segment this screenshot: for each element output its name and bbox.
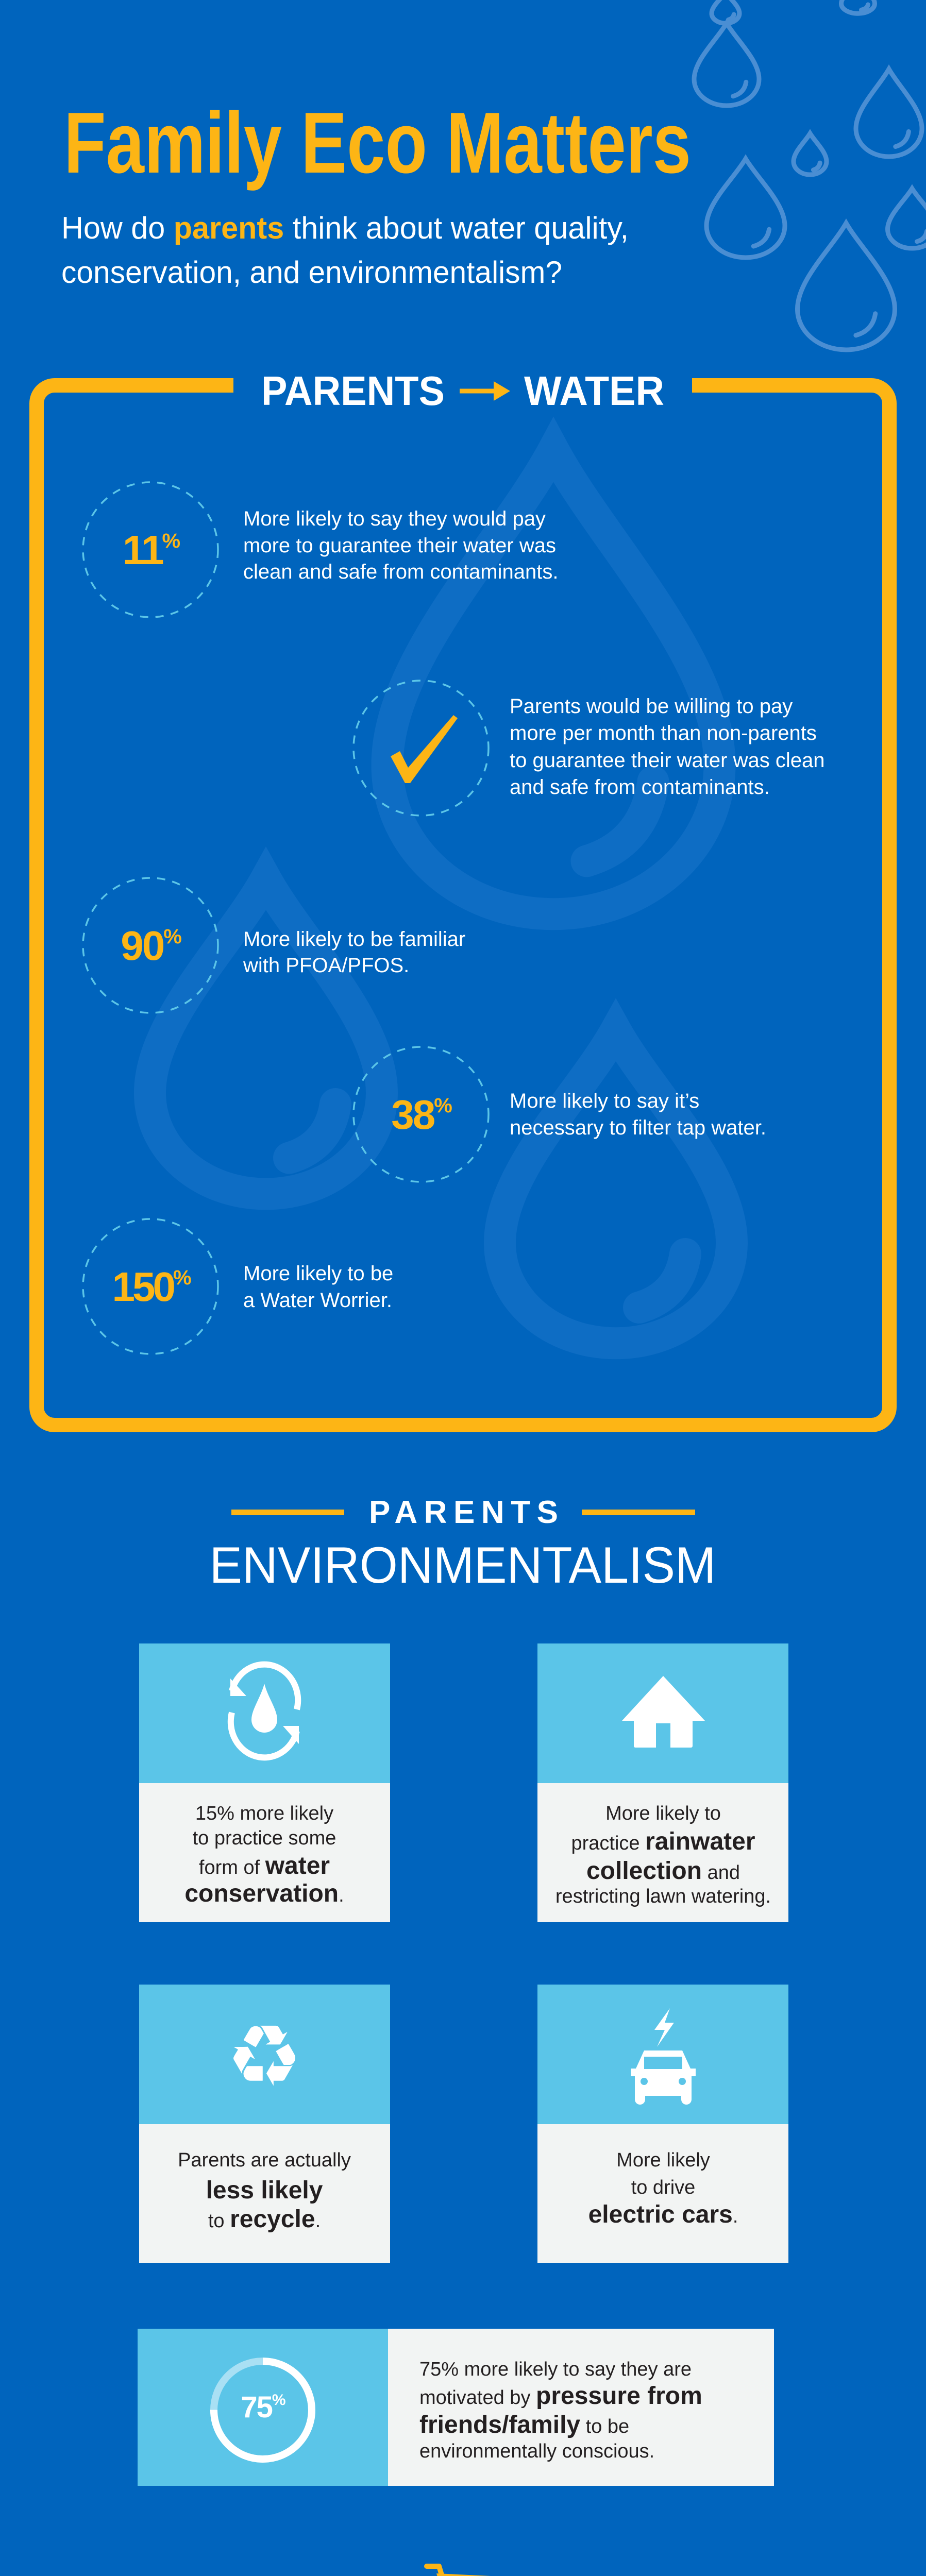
subtitle: conservation, and environmentalism? <box>61 255 562 290</box>
ring chart 75% <box>214 2361 312 2459</box>
stat: 38%: More likely to say it’s <box>510 1090 699 1112</box>
icon: house <box>622 1676 705 1748</box>
stat: 150%: a Water Worrier. <box>243 1289 392 1312</box>
stat: 11%: 11 <box>123 527 162 573</box>
stat: check: more per month than non-parents <box>510 722 817 744</box>
icon: shopping cart <box>427 2566 491 2576</box>
card: rainwater collection: More likely to <box>605 1803 721 1824</box>
panel heading: PARENTS <box>261 368 445 414</box>
heading: parents environmentalism <box>209 1495 716 1594</box>
card: water conservation: form of water <box>199 1852 330 1879</box>
card: water conservation: 15% more likely <box>195 1803 333 1824</box>
stat: 150%: 150 <box>112 1264 173 1310</box>
stat: 150%: More likely to be <box>243 1262 393 1285</box>
stat: 38% <box>353 1047 766 1182</box>
stat: 150%: % <box>173 1266 191 1289</box>
stat: 38%: % <box>434 1094 452 1117</box>
stat: 90% <box>83 878 465 1013</box>
panel heading <box>261 368 664 414</box>
title: Family Eco Matters <box>64 94 691 191</box>
icon: recycle: ♻ <box>226 2007 302 2106</box>
card: recycling: Parents are actually <box>178 2149 351 2171</box>
stat: 90%: with PFOA/PFOS. <box>243 954 409 977</box>
section: header and water panel <box>29 0 926 1432</box>
card: water conservation: conservation. <box>184 1880 344 1907</box>
subtitle: How do parents think about water quality, <box>61 211 629 245</box>
card: 75% social pressure: motivated by pressure from <box>419 2382 702 2410</box>
ring chart 75%: % <box>272 2392 285 2409</box>
stat: check: Parents would be willing to pay <box>510 695 793 718</box>
stat: 150% <box>83 1219 393 1354</box>
card: recycling: less likely <box>206 2177 323 2204</box>
card: electric cars: electric cars. <box>588 2201 738 2228</box>
stat: 11%: More likely to say they would pay <box>243 507 546 530</box>
panel: parents and water <box>37 368 889 1425</box>
stat: 90%: 90 <box>121 923 163 969</box>
stat: check: and safe from contaminants. <box>510 776 770 799</box>
stat: 90%: More likely to be familiar <box>243 928 465 951</box>
subtitle <box>61 211 629 290</box>
icon: water cycle <box>230 1665 299 1757</box>
card: rainwater collection <box>537 1643 788 1922</box>
stat: 38%: 38 <box>391 1092 434 1138</box>
card: electric cars: More likely <box>616 2149 710 2171</box>
divider with cart icon <box>31 2566 883 2576</box>
background drops <box>150 450 732 1343</box>
card: rainwater collection: restricting lawn watering. <box>555 1886 771 1907</box>
card: water conservation: to practice some <box>193 1827 336 1849</box>
card: recycling <box>139 1985 390 2263</box>
card: water conservation <box>139 1643 390 1922</box>
card: 75% social pressure: 75% more likely to say they are <box>419 2359 692 2380</box>
decorative header drops <box>694 0 926 350</box>
panel heading: WATER <box>524 368 664 414</box>
card: rainwater collection: collection and <box>586 1857 740 1885</box>
stat: 38%: necessary to filter tap water. <box>510 1116 766 1139</box>
panel border <box>37 385 889 1425</box>
card: 75% social pressure <box>138 2329 774 2486</box>
stat: check: to guarantee their water was clean <box>510 749 824 772</box>
card: 75% social pressure: friends/family to be <box>419 2411 629 2438</box>
card: electric cars <box>537 1985 788 2263</box>
section: environmentalism <box>138 1495 788 2576</box>
stat: 11%: more to guarantee their water was <box>243 534 556 557</box>
card: rainwater collection: practice rainwater <box>571 1828 755 1855</box>
stat: 11% <box>83 482 558 617</box>
heading: parents environmentalism: ENVIRONMENTALISM <box>209 1536 716 1594</box>
ring chart 75%: 75 <box>241 2391 272 2424</box>
card: 75% social pressure: environmentally conscious. <box>419 2441 654 2462</box>
stat: check <box>353 681 824 816</box>
stat: 11%: clean and safe from contaminants. <box>243 561 558 583</box>
icon: electric car <box>631 2008 696 2105</box>
heading: parents environmentalism: PARENTS <box>369 1495 558 1530</box>
stat: 90%: % <box>163 925 181 948</box>
card: recycling: to recycle. <box>208 2206 321 2233</box>
card: electric cars: to drive <box>631 2177 695 2198</box>
stat: 11%: % <box>162 530 180 552</box>
